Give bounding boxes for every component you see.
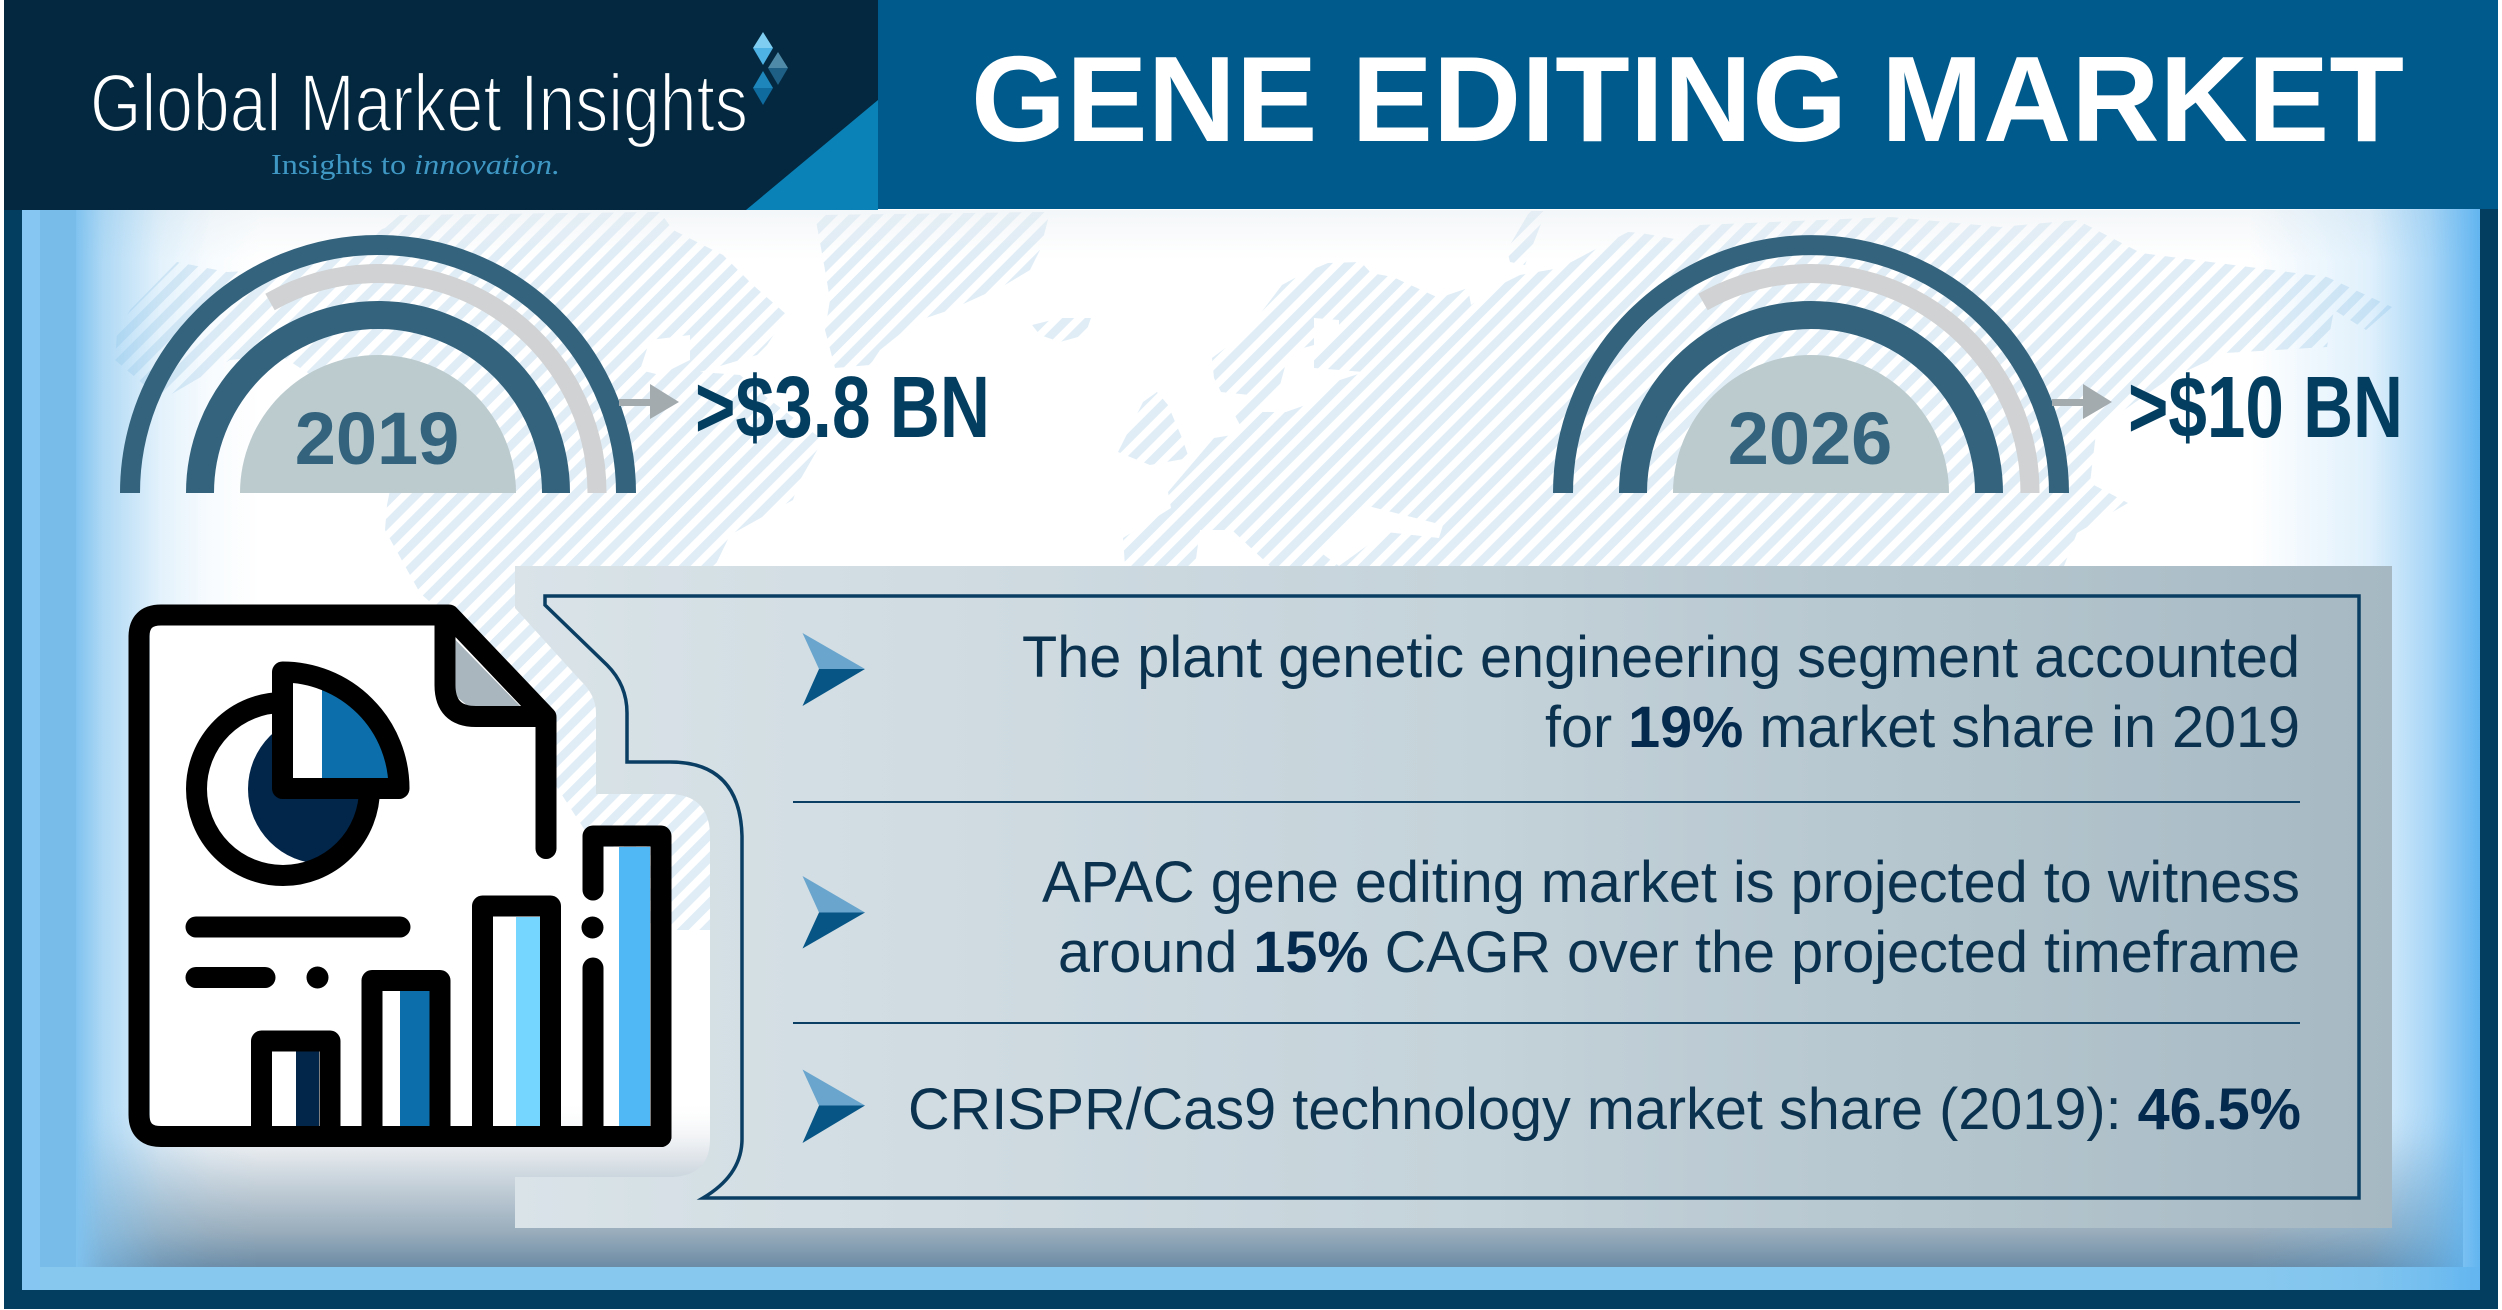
- title: GENE EDITING MARKET: [971, 31, 2404, 167]
- gauge: 2019: 2019: [295, 397, 459, 480]
- divider lines: [793, 802, 2300, 1023]
- finding 2: around 15% CAGR over the projected timeframe: [1058, 920, 2300, 985]
- panel backing shape: [515, 566, 2392, 1228]
- bullet arrow 1: [802, 633, 865, 706]
- logo: [90, 32, 788, 181]
- arrow: 2026 to value: [2052, 384, 2112, 419]
- bullet arrow 3: [802, 1070, 865, 1143]
- finding 2: APAC gene editing market is projected to witness: [1042, 850, 2300, 915]
- finding 1: for 19% market share in 2019: [1545, 695, 2300, 760]
- value: 2019: >$3.8 BN: [695, 359, 990, 456]
- bar chart: [262, 836, 661, 1136]
- value: 2026: >$10 BN: [2128, 359, 2403, 456]
- header bar: [4, 0, 2498, 210]
- gauge: 2026: [1563, 245, 2059, 493]
- arrow: 2019 to value: [619, 384, 679, 419]
- finding 1: [1022, 625, 2300, 760]
- finding 3: CRISPR/Cas9 technology market share (2019): 46.5%: [908, 1077, 2301, 1142]
- background world map: [116, 211, 2392, 930]
- logo: Insights to innovation.: [271, 149, 560, 181]
- gauge: 2026: 2026: [1728, 397, 1892, 480]
- document sheet: [150, 625, 546, 1126]
- page fold: [456, 640, 520, 706]
- finding 2: [1042, 850, 2300, 985]
- logo: Global Market Insights: [90, 58, 748, 149]
- panel: key findings: [515, 566, 2392, 1228]
- gauge: 2019: [130, 245, 626, 493]
- icon: report document with charts: [139, 615, 661, 1136]
- bullet arrow 2: [802, 876, 865, 948]
- pie chart: [196, 672, 402, 876]
- text lines: [196, 927, 400, 988]
- document outline: [139, 615, 661, 1136]
- finding 1: The plant genetic engineering segment accounted: [1022, 625, 2300, 690]
- panel outline: [545, 596, 2359, 1198]
